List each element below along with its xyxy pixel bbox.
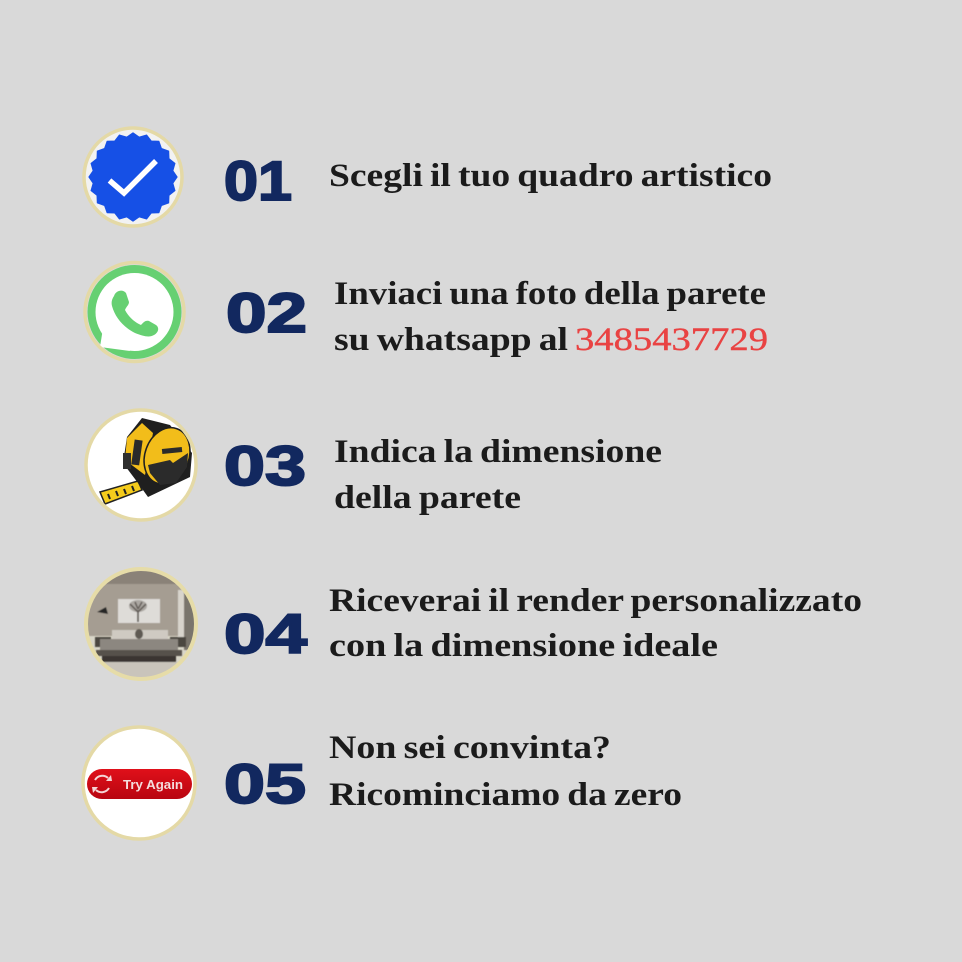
text: step 3: della parete	[334, 480, 521, 516]
number 04: 04	[224, 602, 307, 665]
number 03: 03	[224, 434, 306, 497]
icon: try again button: Try Again	[123, 777, 183, 792]
text: step 5: Non sei convinta?	[329, 730, 611, 766]
icon: blue verified badge	[84, 128, 182, 226]
step 4	[85, 569, 862, 682]
step 3	[86, 410, 662, 520]
icon: whatsapp	[85, 262, 184, 362]
step 1	[84, 128, 772, 226]
text: step 5: Ricominciamo da zero	[329, 777, 682, 813]
number 01: 01	[224, 149, 292, 212]
step 2	[85, 262, 768, 362]
text: step 4: con la dimensione ideale	[329, 628, 718, 664]
text: step 2: Inviaci una foto della parete	[334, 276, 766, 312]
text: step 1: Scegli il tuo quadro artistico	[329, 158, 772, 194]
text: step 4	[329, 583, 862, 664]
text: step 3: Indica la dimensione	[334, 434, 662, 470]
icon: tape measure	[86, 410, 198, 520]
text: step 2	[334, 276, 768, 358]
text: step 2: su whatsapp al	[334, 322, 568, 358]
icon: bedroom render	[85, 569, 198, 682]
text: step 4: Riceverai il render personalizzato	[329, 583, 862, 619]
text: step 3	[334, 434, 662, 516]
number 05: 05	[224, 752, 306, 815]
step 5	[83, 727, 682, 839]
icon: try again button	[83, 727, 195, 839]
phone number: 3485437729	[575, 322, 768, 358]
text: step 5	[329, 730, 682, 813]
number 02: 02	[226, 281, 307, 344]
